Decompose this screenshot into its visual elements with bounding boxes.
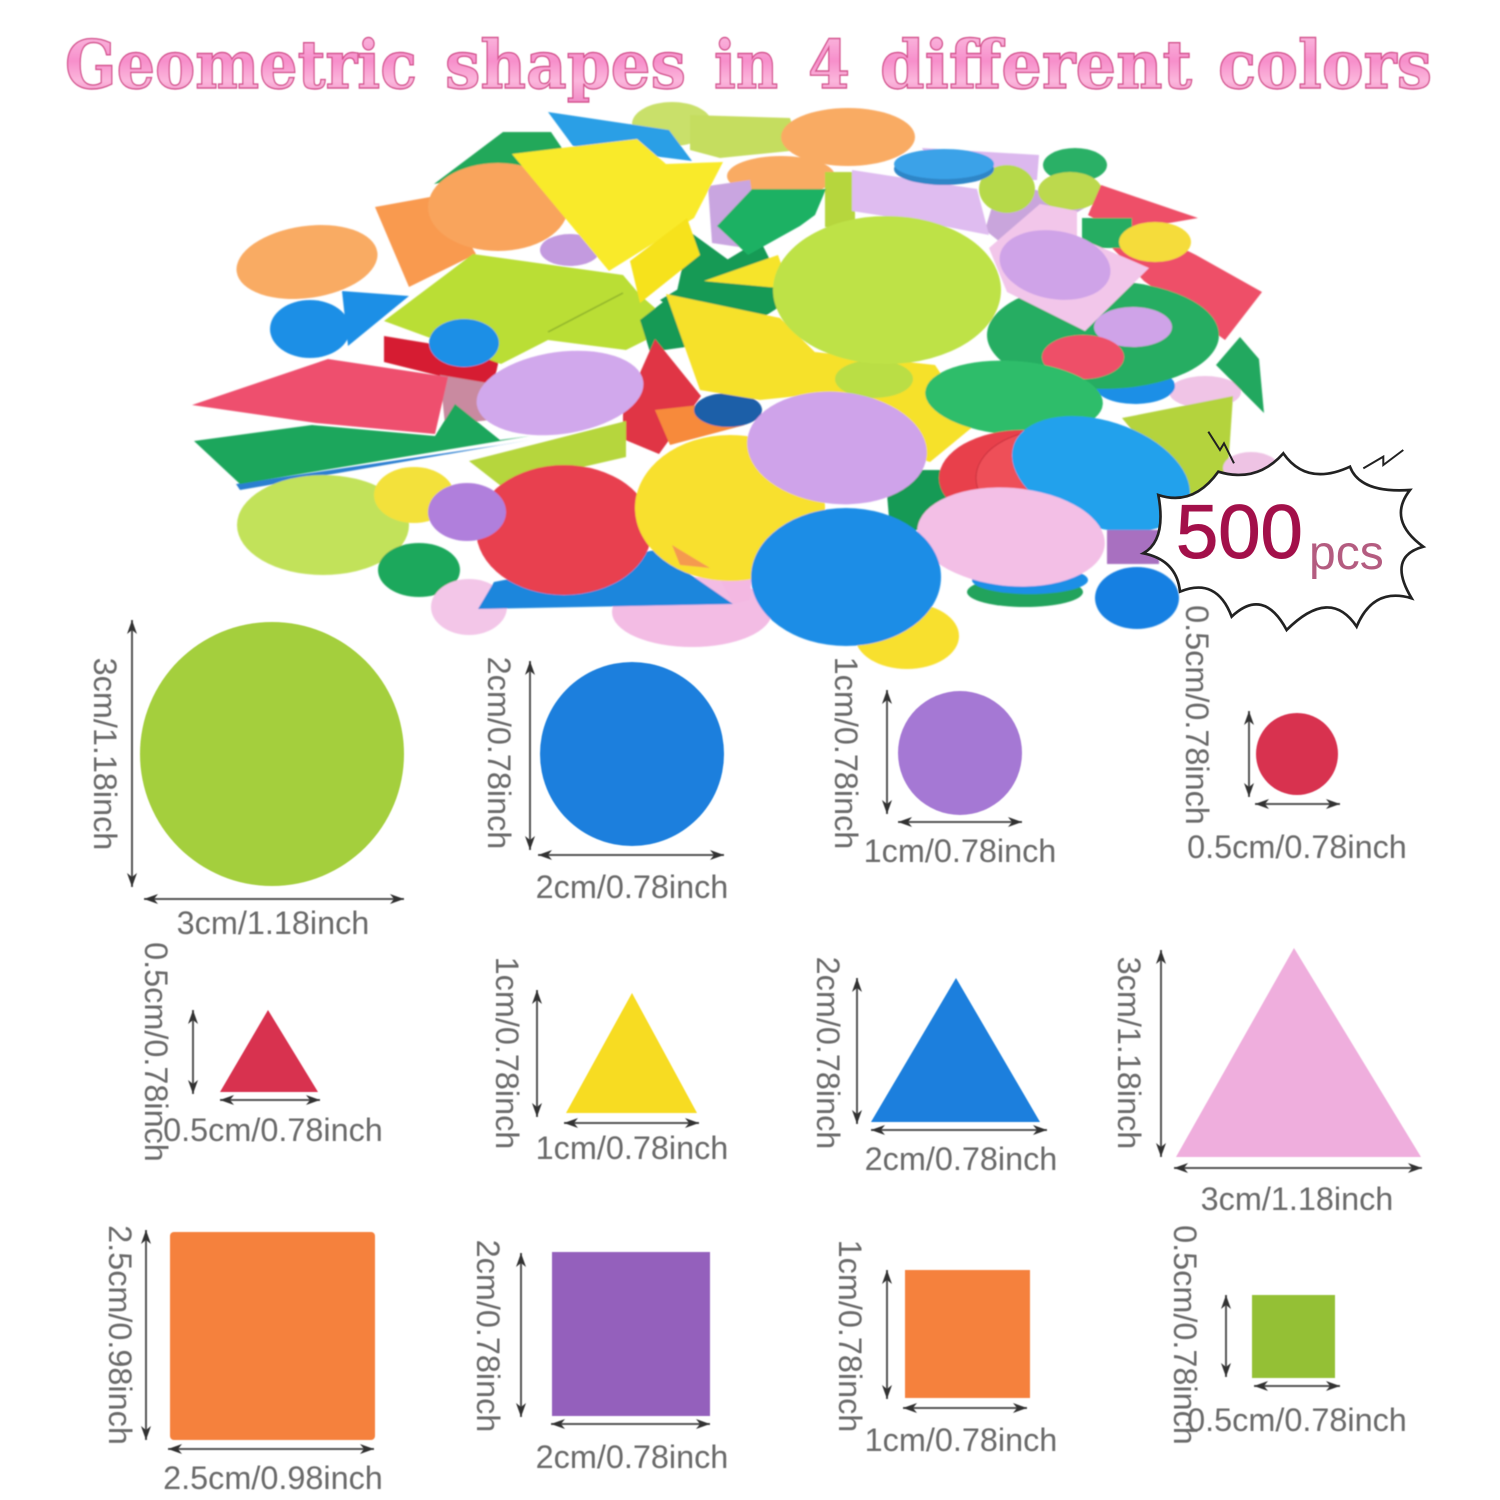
triangle 0.5cm: [138, 942, 383, 1162]
triangle 1cm: 1cm/0.78inch: [536, 1130, 728, 1166]
500 pcs starburst badge: [1143, 432, 1423, 630]
triangle 3cm: 3cm/1.18inch: [1201, 1181, 1393, 1217]
title: shapes: [445, 26, 686, 104]
square 0.5cm: 0.5cm/0.78inch: [1167, 1225, 1203, 1445]
circle 3cm: 3cm/1.18inch: [87, 658, 123, 850]
title: 4: [808, 26, 850, 104]
square 1cm: 1cm/0.78inch: [865, 1422, 1057, 1458]
lightning marks: [1208, 432, 1403, 468]
circle 2cm: 2cm/0.78inch: [481, 657, 517, 849]
circle 2cm: 2cm/0.78inch: [536, 869, 728, 905]
circle 0.5cm: [1179, 605, 1407, 865]
square 0.5cm: 0.5cm/0.78inch: [1187, 1402, 1407, 1438]
title: in: [714, 26, 778, 104]
circle 0.5cm: 0.5cm/0.78inch: [1187, 829, 1407, 865]
triangle 3cm: 3cm/1.18inch: [1111, 957, 1147, 1149]
square 1cm: [832, 1240, 1057, 1458]
circle 1cm: 1cm/0.78inch: [864, 833, 1056, 869]
triangle 1cm: 1cm/0.78inch: [489, 957, 525, 1149]
triangle 2cm: 2cm/0.78inch: [865, 1141, 1057, 1177]
circle 2cm: [481, 657, 728, 905]
triangle 2cm: 2cm/0.78inch: [810, 957, 846, 1149]
500 value: 500: [1176, 490, 1303, 575]
square 2cm: [470, 1240, 728, 1475]
title: different: [880, 26, 1192, 104]
burst outline: [1143, 453, 1423, 630]
circle 1cm: [828, 657, 1056, 869]
title: colors: [1218, 26, 1432, 104]
square 2.5cm: 2.5cm/0.98inch: [102, 1225, 138, 1445]
square 2cm: 2cm/0.78inch: [536, 1439, 728, 1475]
title: Geometric: [65, 26, 417, 104]
pcs unit: pcs: [1309, 527, 1384, 580]
square 2cm: 2cm/0.78inch: [470, 1240, 506, 1432]
square 1cm: 1cm/0.78inch: [832, 1240, 868, 1432]
triangle 3cm: [1111, 948, 1422, 1217]
circle 3cm: 3cm/1.18inch: [177, 905, 369, 941]
square 0.5cm: [1167, 1225, 1407, 1445]
triangle 0.5cm: 0.5cm/0.78inch: [163, 1112, 383, 1148]
circle 0.5cm: 0.5cm/0.78inch: [1179, 605, 1215, 825]
triangle 0.5cm: 0.5cm/0.78inch: [138, 942, 174, 1162]
title: [65, 26, 1432, 104]
circle 1cm: 1cm/0.78inch: [828, 657, 864, 849]
foam shapes pile illustration: [192, 102, 1279, 669]
square 2.5cm: [102, 1225, 383, 1496]
triangle 1cm: [489, 957, 728, 1166]
triangle 2cm: [810, 957, 1057, 1177]
circle 3cm: [87, 620, 404, 941]
square 2.5cm: 2.5cm/0.98inch: [163, 1460, 383, 1496]
